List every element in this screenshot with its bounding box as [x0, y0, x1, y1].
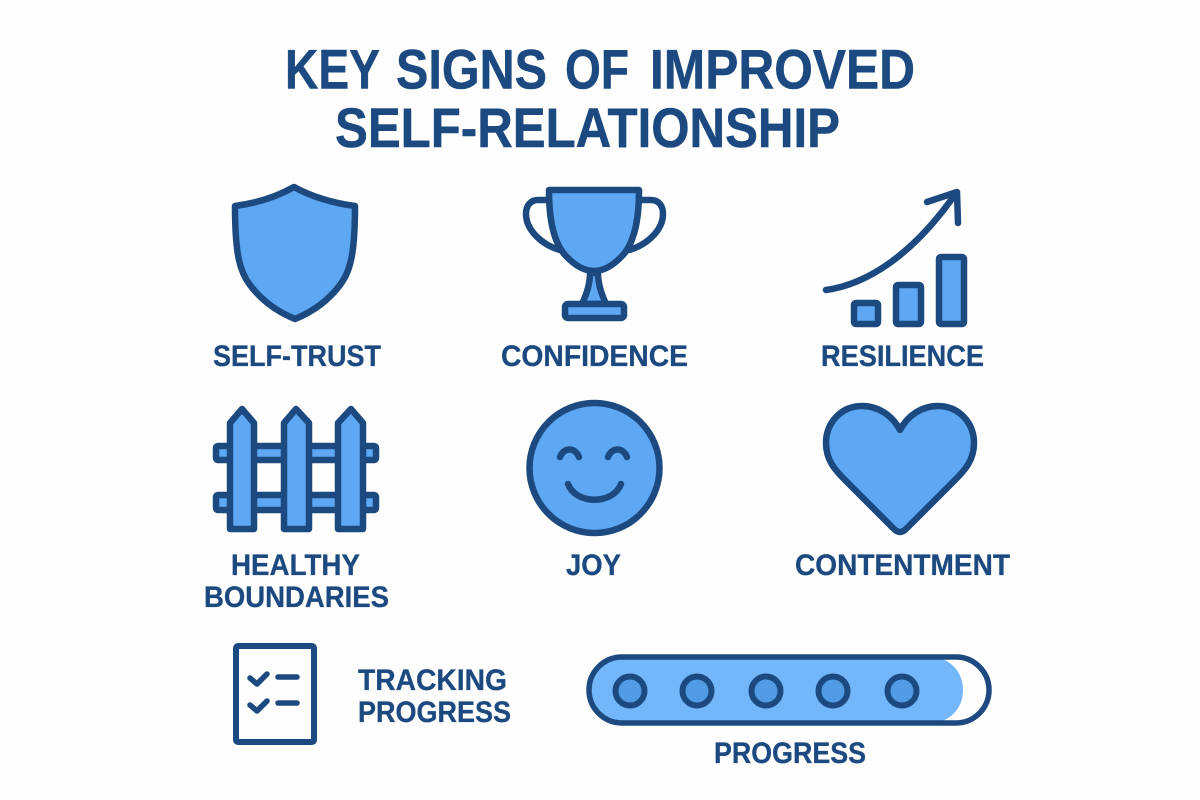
icon: trophy [526, 190, 663, 318]
title: IMPROVED [650, 38, 915, 100]
panel: resilience [821, 192, 984, 373]
title: KEY [285, 38, 380, 100]
panel: tracking progress [236, 646, 511, 742]
label: tracking progress: TRACKING [358, 664, 507, 697]
icon: shield [235, 187, 355, 319]
title: SIGNS [396, 38, 547, 100]
title [285, 38, 915, 159]
title: OF [565, 38, 629, 100]
label: healthy boundaries: HEALTHY [231, 549, 360, 582]
label: contentment: CONTENTMENT [795, 549, 1010, 582]
icon: fence [216, 409, 376, 529]
icon: checklist [236, 646, 314, 742]
label: healthy boundaries [204, 549, 389, 614]
label: confidence: CONFIDENCE [501, 340, 688, 373]
label: progress: PROGRESS [714, 737, 866, 770]
title: SELF-RELATIONSHIP [335, 96, 840, 159]
progress fill [589, 657, 963, 723]
icon: rising bars and arrow [826, 192, 964, 324]
progress track [589, 657, 989, 723]
progress dots [616, 676, 916, 706]
panel: self-trust [213, 187, 381, 373]
icon: smiley [530, 403, 660, 533]
panel: joy [530, 403, 660, 582]
panel: healthy boundaries [204, 409, 389, 614]
label: tracking progress [358, 664, 511, 729]
label: joy: JOY [566, 549, 621, 582]
progress outline [589, 657, 989, 723]
icon: heart [826, 406, 974, 532]
panel: contentment [795, 406, 1010, 582]
panel: confidence [501, 190, 688, 373]
label: healthy boundaries: BOUNDARIES [204, 581, 389, 614]
label: resilience: RESILIENCE [821, 340, 984, 373]
panel: progress bar [589, 657, 989, 770]
label: tracking progress: PROGRESS [358, 696, 511, 729]
label: self-trust: SELF-TRUST [213, 340, 381, 373]
